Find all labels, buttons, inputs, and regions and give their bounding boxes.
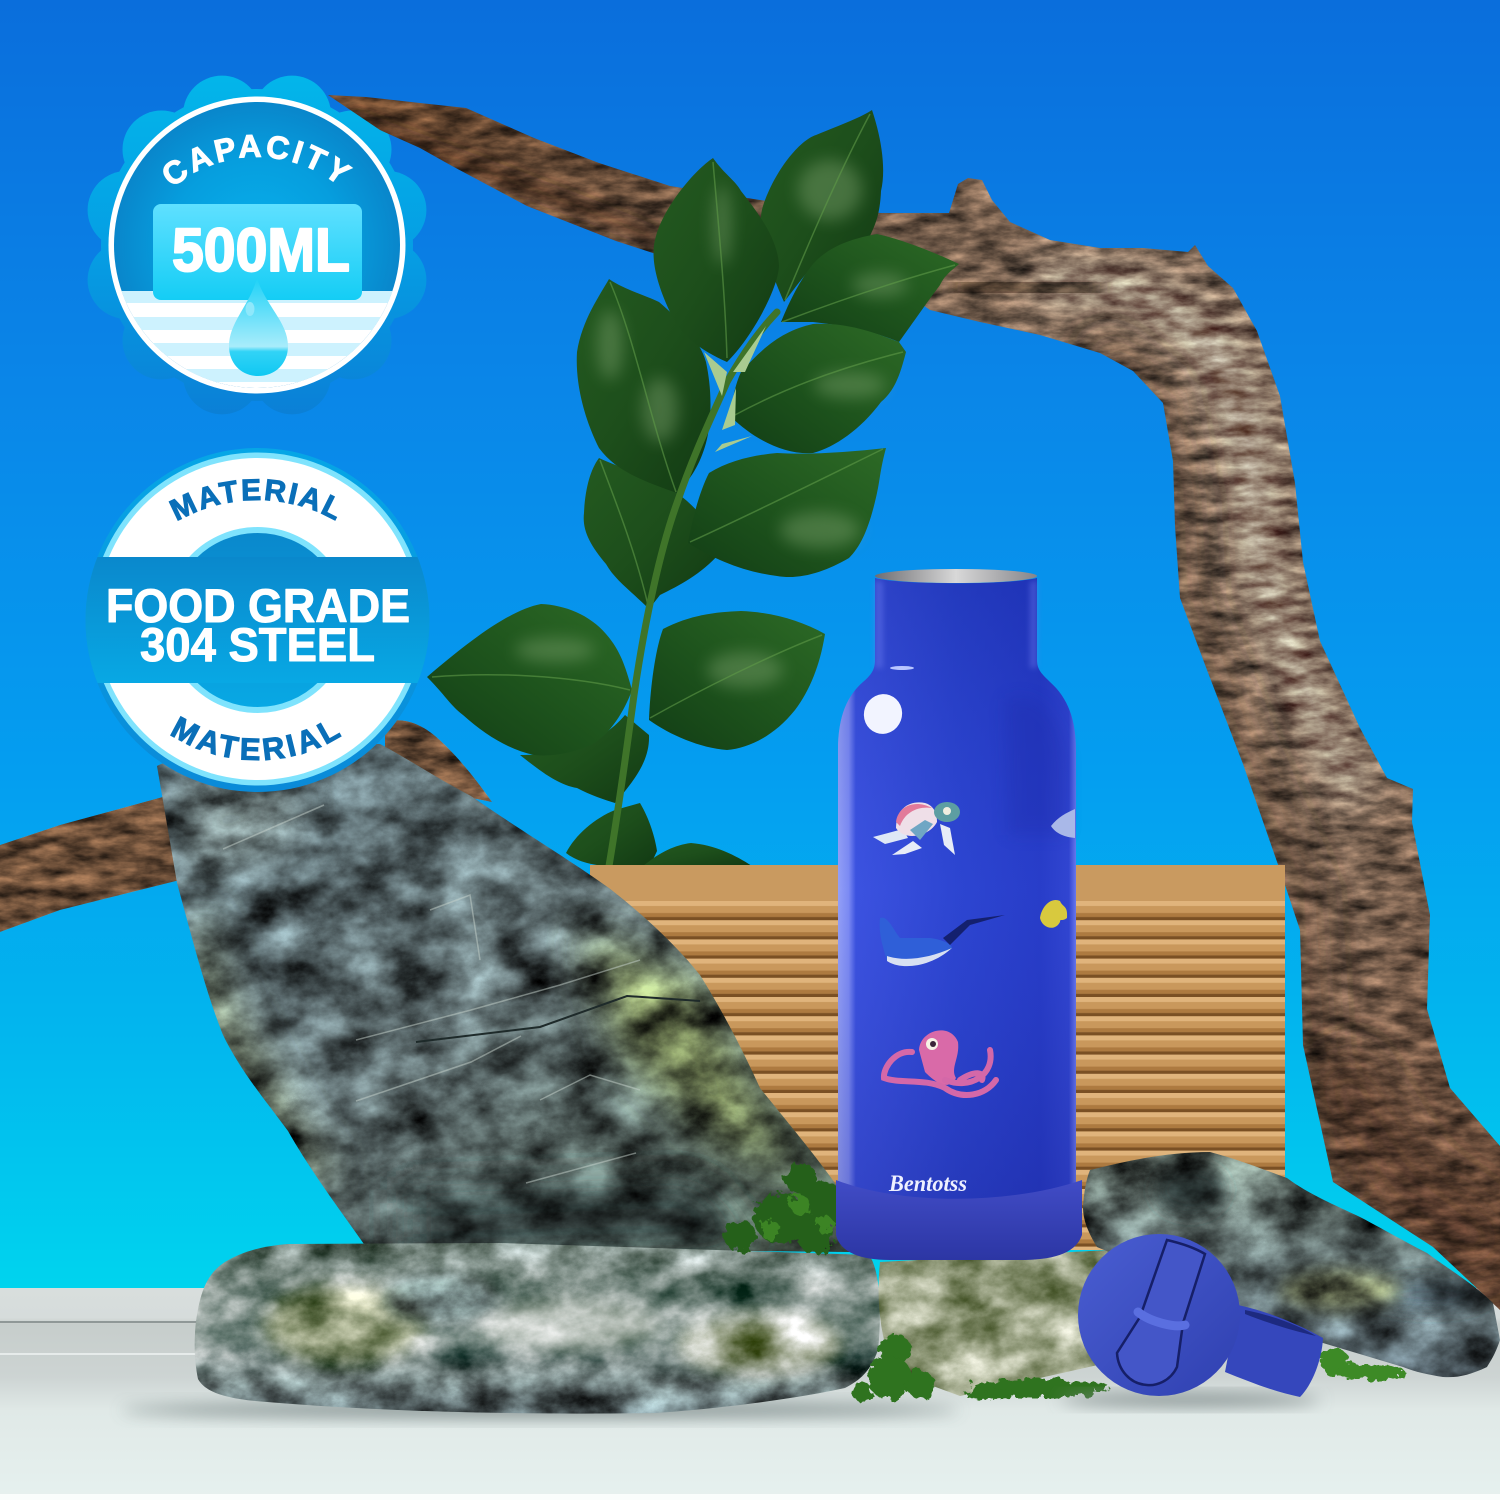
gloss highlight [858, 689, 908, 739]
500ML panel [153, 204, 362, 300]
white ring [108, 96, 406, 394]
outer blue ring [86, 448, 430, 792]
leaf gloss [515, 160, 908, 688]
rock veins [223, 805, 640, 1183]
white disc [96, 458, 418, 780]
channel collar [1138, 1312, 1185, 1326]
large leaning rock [140, 730, 860, 1260]
lid shadow [1060, 1394, 1320, 1406]
inner blue circle [170, 533, 344, 707]
neck shoulder line highlight [890, 666, 914, 670]
plant [427, 110, 959, 866]
tree branch: lower left [0, 720, 492, 932]
striped water area [122, 291, 392, 388]
pale ring [91, 452, 424, 786]
bottle [836, 569, 1082, 1260]
right rock [1075, 1145, 1500, 1385]
capacity label: CAPACITY [163, 134, 354, 184]
brand logo: Bentotss [888, 1171, 967, 1196]
tree branch: main arch [320, 90, 1500, 1315]
icon: water drop [229, 278, 288, 376]
flat foreground rock [190, 1238, 890, 1418]
304 steel text: 304 STEEL [140, 618, 375, 671]
central band [80, 557, 435, 683]
food grade text: FOOD GRADE [106, 579, 410, 632]
yellow fish illustration [1040, 900, 1067, 928]
bottle body [838, 578, 1076, 1200]
turtle illustration [873, 802, 960, 855]
wooden slatted block [590, 865, 1285, 1250]
middle rock behind bottle [878, 1250, 1108, 1396]
dolphin illustration [1051, 809, 1075, 838]
badge: material [86, 448, 430, 792]
neck edge sheen [875, 580, 1037, 668]
inner blue disc [114, 102, 400, 388]
stingray illustration [880, 915, 1005, 966]
top material label: MATERIAL [168, 478, 338, 521]
500ML value: 500ML [172, 216, 350, 284]
pale inner ring [164, 527, 350, 713]
silicone base [836, 1180, 1082, 1260]
right side reflection [1005, 697, 1066, 835]
lid channel [1117, 1240, 1205, 1385]
scalloped badge edge [88, 76, 426, 414]
leaves back [520, 110, 883, 866]
rock shadows on floor [120, 1402, 960, 1418]
octopus illustration [884, 1030, 996, 1095]
bottom material label: MATERIAL [170, 716, 342, 761]
pale bracts [704, 326, 766, 452]
badge: capacity 500ML [88, 76, 426, 414]
bottle lid [1078, 1234, 1323, 1397]
lid strap [1225, 1305, 1323, 1397]
stem [609, 312, 777, 866]
strap opening [1245, 1310, 1316, 1336]
floor surface [0, 1288, 1500, 1500]
leaf midribs [432, 114, 955, 718]
steel rim [875, 569, 1037, 583]
moss clumps [724, 1162, 1405, 1402]
lid disc [1078, 1234, 1240, 1396]
rock cracks [416, 996, 700, 1042]
